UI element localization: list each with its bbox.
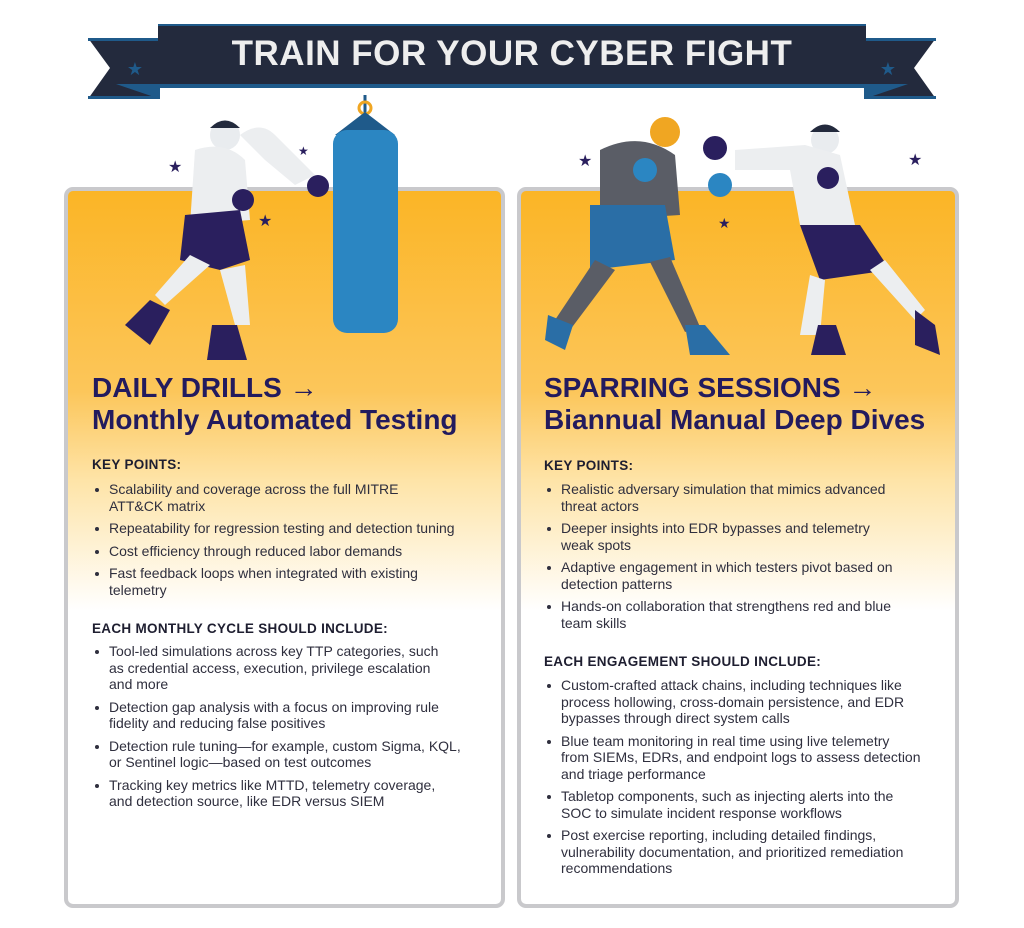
illustration: sparring boxers [545, 117, 940, 355]
illustration: boxer and punching bag: ★ [258, 213, 272, 230]
subheading: engagement: EACH ENGAGEMENT SHOULD INCLUDE: [544, 654, 821, 669]
list: monthly cycle: or Sentinel logic—based on test outcomes [109, 754, 371, 770]
list: monthly cycle: and more [109, 676, 168, 692]
illustration: boxer and punching bag [125, 95, 398, 360]
list: key points right: detection patterns [561, 576, 672, 592]
heading: daily drills [92, 372, 458, 435]
illustration: boxer and punching bag: ★ [168, 159, 182, 176]
list: key points left: telemetry [109, 582, 167, 598]
list: engagement: process hollowing, cross-domain persistence, and EDR [561, 694, 904, 710]
list: key points right: Deeper insights into EDR bypasses and telemetry [561, 520, 870, 536]
list: engagement: vulnerability documentation, and prioritized remediation [561, 844, 903, 860]
subheading: monthly cycle: EACH MONTHLY CYCLE SHOULD INCLUDE: [92, 621, 388, 636]
list: monthly cycle [95, 643, 461, 809]
subheading: key points right: KEY POINTS: [544, 458, 633, 473]
list: monthly cycle: Tool-led simulations across key TTP categories, such [109, 643, 438, 659]
list: monthly cycle: as credential access, execution, privilege escalation [109, 660, 430, 676]
ribbon tail left: ★ [127, 59, 143, 79]
list: engagement: and triage performance [561, 766, 706, 782]
illustration: sparring boxers: ★ [718, 215, 731, 231]
list: engagement: Post exercise reporting, including detailed findings, [561, 827, 876, 843]
heading: sparring sessions: Biannual Manual Deep Dives [544, 404, 925, 435]
list: engagement: Custom-crafted attack chains, including techniques like [561, 677, 902, 693]
list: engagement: SOC to simulate incident response workflows [561, 804, 842, 820]
list: monthly cycle: Detection gap analysis with a focus on improving rule [109, 698, 439, 714]
list: key points left: ATT&CK matrix [109, 498, 205, 514]
list: key points right: Hands-on collaboration that strengthens red and blue [561, 598, 891, 614]
list: key points right: threat actors [561, 498, 639, 514]
illustration: sparring boxers: ★ [908, 152, 922, 169]
list: engagement: Tabletop components, such as injecting alerts into the [561, 788, 893, 804]
list: key points left: Repeatability for regression testing and detection tuning [109, 520, 455, 536]
panel: daily drills [64, 187, 505, 908]
list: key points right: Adaptive engagement in which testers pivot based on [561, 559, 893, 575]
list: monthly cycle: Tracking key metrics like MTTD, telemetry coverage, [109, 776, 435, 792]
list: engagement: from SIEMs, EDRs, and endpoint logs to assess detection [561, 749, 921, 765]
list: key points left: Scalability and coverage across the full MITRE [109, 481, 398, 497]
list: key points right: Realistic adversary simulation that mimics advanced [561, 481, 885, 497]
list: monthly cycle: and detection source, like EDR versus SIEM [109, 793, 384, 809]
panel: sparring sessions [517, 187, 959, 908]
heading: sparring sessions [544, 372, 925, 435]
list: engagement: recommendations [561, 860, 672, 876]
list: key points right: team skills [561, 614, 626, 630]
list: key points left [95, 481, 455, 598]
ribbon tail right: ★ [880, 59, 896, 79]
ribbon tail left [88, 38, 160, 99]
list: engagement: bypasses through direct system calls [561, 710, 790, 726]
illustration: boxer and punching bag: ★ [298, 144, 309, 158]
list: monthly cycle: fidelity and reducing false positives [109, 715, 325, 731]
subheading: key points left: KEY POINTS: [92, 457, 181, 472]
illustration: sparring boxers: ★ [578, 153, 592, 170]
list: key points left: Cost efficiency through reduced labor demands [109, 542, 402, 558]
heading: daily drills: Monthly Automated Testing [92, 404, 458, 435]
list: monthly cycle: Detection rule tuning—for example, custom Sigma, KQL, [109, 738, 461, 754]
banner [88, 24, 936, 99]
ribbon tail right [864, 38, 936, 99]
list: key points right: weak spots [561, 536, 631, 552]
list: engagement [547, 677, 921, 876]
title: TRAIN FOR YOUR CYBER FIGHT [232, 34, 792, 73]
list: engagement: Blue team monitoring in real time using live telemetry [561, 732, 889, 748]
heading: daily drills: DAILY DRILLS → [92, 372, 318, 403]
list: key points right [547, 481, 893, 630]
list: key points left: Fast feedback loops when integrated with existing [109, 565, 418, 581]
heading: sparring sessions: SPARRING SESSIONS → [544, 372, 876, 403]
